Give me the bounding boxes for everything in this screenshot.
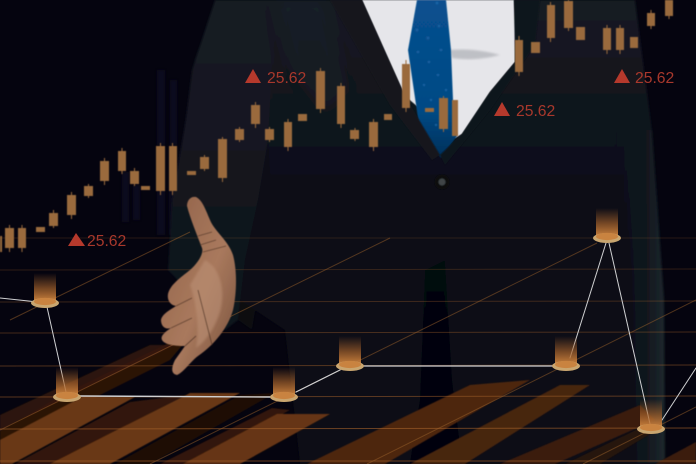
palm shading <box>190 260 222 348</box>
network node 7 <box>637 399 665 434</box>
network node 3 <box>270 367 298 402</box>
right lapel <box>440 0 540 165</box>
price label 1 <box>245 69 306 87</box>
price label 3: 25.62 <box>635 70 674 87</box>
shirt shadow <box>450 49 500 59</box>
network node 5 <box>552 336 580 371</box>
horizontal grid lines <box>0 238 696 461</box>
shirt <box>362 0 516 138</box>
network node 2 <box>53 367 81 402</box>
suit: torso and sleeves <box>168 0 665 464</box>
button <box>434 174 450 190</box>
price label 3 <box>614 69 674 87</box>
candle wicks <box>10 0 669 252</box>
price label 1: 25.62 <box>267 70 306 87</box>
orange diagonal stripes <box>0 330 696 464</box>
right sleeve edge <box>610 130 665 464</box>
price label 4 <box>68 233 126 250</box>
finger separations and creases <box>171 232 226 346</box>
price label 4: 25.62 <box>87 233 126 250</box>
network node 6 <box>593 208 621 243</box>
network node 1 <box>31 273 59 308</box>
network connection lines <box>0 243 696 424</box>
tie <box>408 0 457 158</box>
suit body <box>170 0 665 464</box>
candlestick chart <box>0 0 673 252</box>
left sleeve <box>168 0 272 330</box>
hand <box>161 197 236 375</box>
chart background columns <box>122 70 177 235</box>
price label 2: 25.62 <box>516 103 555 120</box>
tie blade <box>408 0 457 158</box>
palm and fingers <box>161 197 236 375</box>
price label 2 <box>494 102 555 120</box>
network node 4 <box>336 336 364 371</box>
diagonal grid lines <box>0 232 696 464</box>
sleeve highlight <box>275 0 345 110</box>
left lapel <box>330 0 440 160</box>
tie dots <box>416 2 447 126</box>
sleeve shadow <box>238 140 272 330</box>
lower suit shadow <box>410 260 462 464</box>
